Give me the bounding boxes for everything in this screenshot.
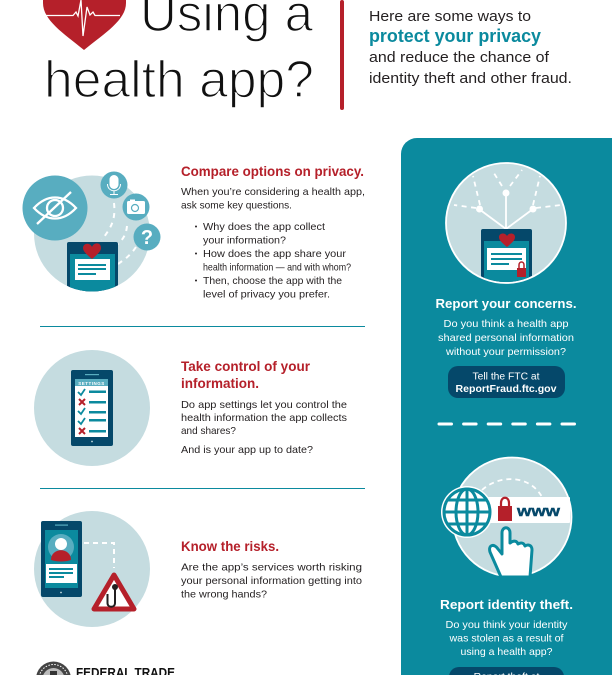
bullet list: your information? <box>203 236 286 246</box>
bullet list: health information — and with whom? <box>203 262 351 274</box>
divider: header red bar <box>340 0 344 110</box>
paragraph: health information the app collects <box>181 413 347 424</box>
section: compare options on privacy <box>181 164 365 300</box>
icon group: settings phone: SETTINGS <box>78 381 105 386</box>
paragraph: Do you think a health app <box>444 319 569 330</box>
paragraph <box>438 319 574 358</box>
icon: tablet <box>67 242 118 294</box>
bullet list: Why does the app collect <box>203 222 325 233</box>
panel: report <box>401 138 612 675</box>
header intro text: and reduce the chance of <box>369 49 550 66</box>
title <box>44 0 314 109</box>
heading: information. <box>181 376 259 391</box>
heading: Take control of your <box>181 359 311 374</box>
paragraph <box>181 562 362 600</box>
header intro text: Here are some ways to <box>369 8 531 25</box>
heading <box>181 359 311 391</box>
section: know the risks <box>181 539 362 600</box>
icon: heart with heartbeat <box>43 0 126 50</box>
logo: Federal Trade Commission <box>36 662 175 675</box>
icon: camera <box>122 194 150 220</box>
icon group: risks <box>34 511 150 627</box>
paragraph <box>181 400 347 456</box>
icon: dashed connectors <box>102 203 136 264</box>
heading: report identity theft: Report identity theft. <box>440 597 573 612</box>
button: report theft <box>449 667 564 675</box>
paragraph: the wrong hands? <box>181 590 267 600</box>
paragraph: ask some key questions. <box>181 200 292 212</box>
button: tell the FTC <box>448 366 565 398</box>
paragraph: When you’re considering a health app, <box>181 187 365 198</box>
header intro text <box>369 8 572 87</box>
heading: Compare options on privacy. <box>181 164 364 179</box>
bullet list: level of privacy you prefer. <box>203 290 330 300</box>
icon group: compare privacy <box>22 172 160 294</box>
paragraph: Are the app’s services worth risking <box>181 562 362 574</box>
icon: secure website click: www <box>516 504 561 520</box>
icon: small heart <box>83 243 101 259</box>
paragraph: shared personal information <box>438 333 574 344</box>
icon: question mark: ? <box>141 227 153 249</box>
section: take control <box>181 359 347 456</box>
paragraph <box>446 620 568 658</box>
paragraph: and shares? <box>181 426 236 437</box>
paragraph: without your permission? <box>445 347 566 358</box>
icon group: settings phone <box>34 350 150 466</box>
icon: microphone <box>100 172 128 198</box>
paragraph: using a health app? <box>460 647 553 658</box>
heading: Know the risks. <box>181 539 279 554</box>
paragraph: was stolen as a result of <box>448 634 564 644</box>
title: health app? <box>44 51 314 109</box>
icon: secure website click <box>441 458 572 577</box>
header intro text: identity theft and other fraud. <box>369 70 572 87</box>
paragraph: Do you think your identity <box>446 620 568 631</box>
icon: data spreading from tablet <box>446 163 566 287</box>
paragraph <box>181 187 365 212</box>
bullet list: How does the app share your <box>203 249 347 260</box>
button: tell the FTC: Tell the FTC at <box>472 372 540 382</box>
paragraph: And is your app up to date? <box>181 445 313 456</box>
button: tell the FTC: ReportFraud.ftc.gov <box>456 384 557 395</box>
bullet list <box>195 222 351 300</box>
bullet list: Then, choose the app with the <box>203 276 342 287</box>
paragraph: your personal information getting into <box>181 576 362 587</box>
header intro text: protect your privacy <box>369 26 541 46</box>
paragraph: Do app settings let you control the <box>181 400 347 411</box>
icon: crossed eye <box>22 176 88 240</box>
heading: report your concerns: Report your concerns. <box>436 296 576 311</box>
